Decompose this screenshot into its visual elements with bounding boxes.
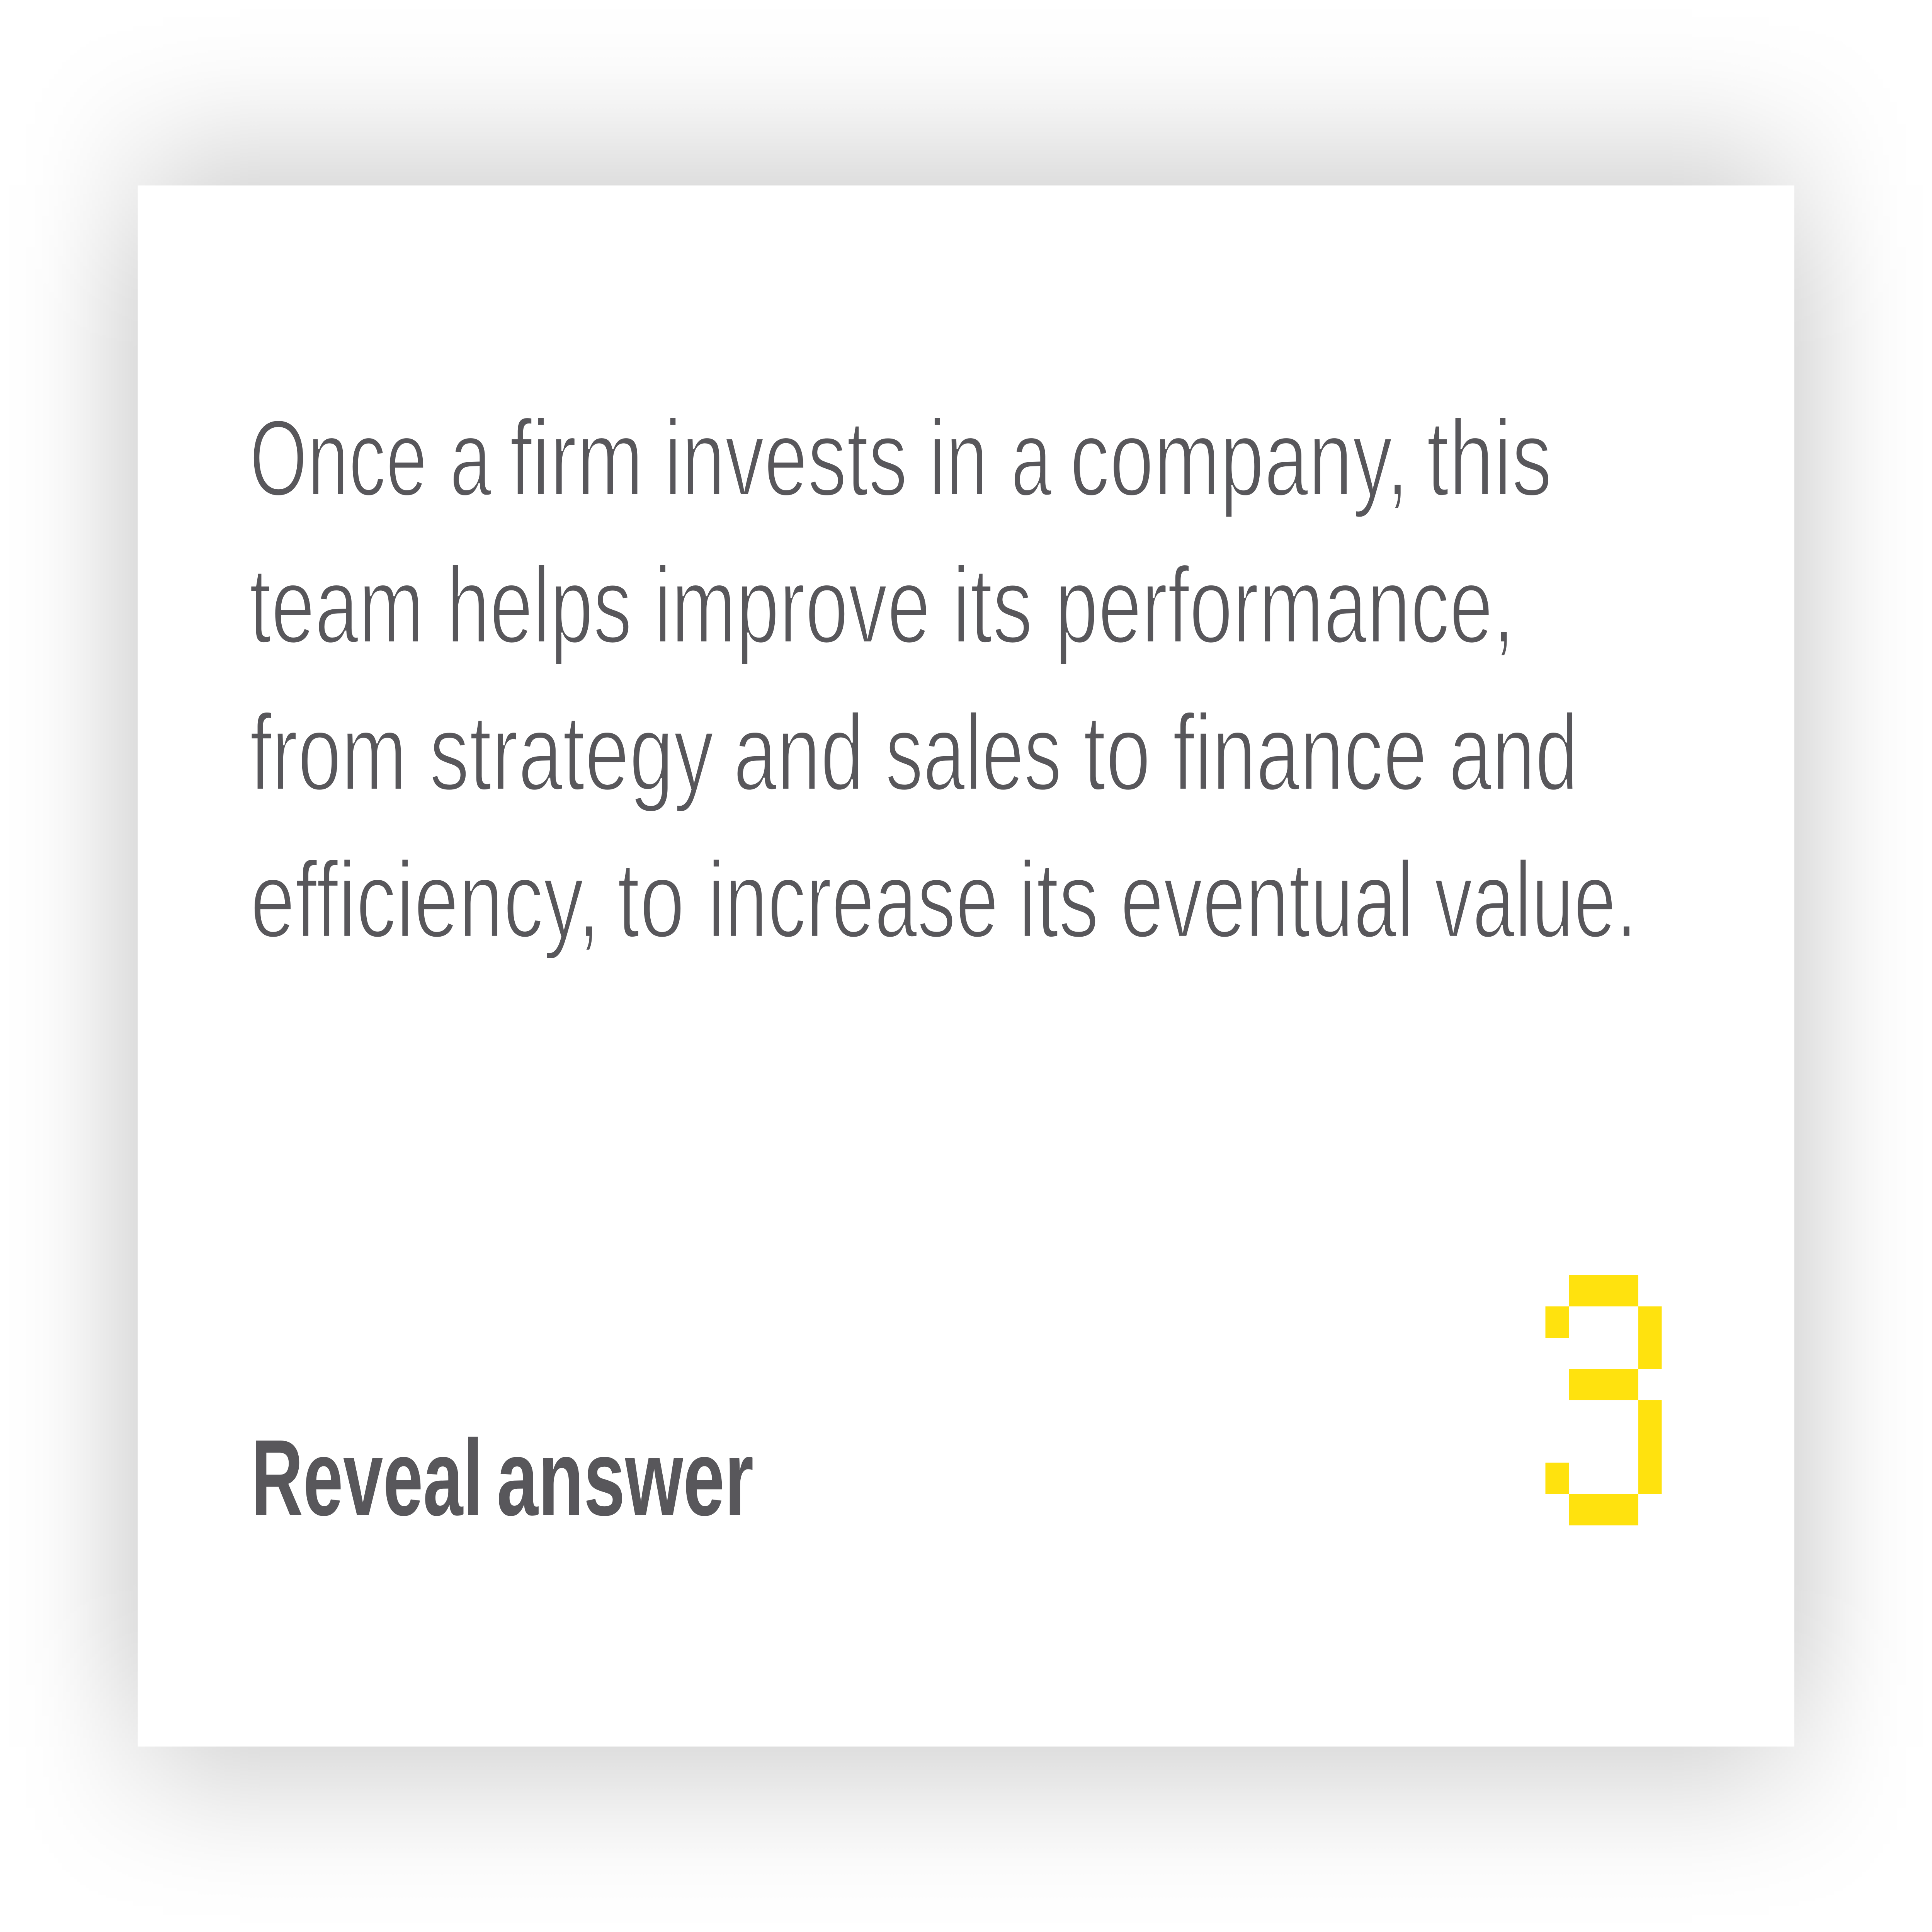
button label: reveal answer: Reveal [251,1418,483,1538]
line 1 [250,398,1552,519]
line 1: in [929,398,988,519]
line 2: performance, [1055,545,1515,666]
line 3: to [1083,692,1151,813]
line 2 [249,545,1515,666]
line 2: helps [447,545,632,666]
line 1: a [1011,398,1052,519]
line 3: sales [885,692,1062,813]
text block: card description [249,398,1637,960]
line 4: value. [1435,840,1637,960]
line 3: finance [1173,692,1427,813]
line 1: Once [250,398,427,519]
line 1: firm [510,398,643,519]
button label: reveal answer [251,1418,753,1538]
line 1: company, [1070,398,1408,519]
line 3: from [250,692,407,813]
line 4: efficiency, [250,840,600,960]
line 4 [250,840,1637,960]
line 1: a [450,398,492,519]
line 3: and [733,692,864,813]
line 1: invests [664,398,908,519]
line 2: team [249,545,424,666]
line 4: increase [707,840,998,960]
icon: yellow pixel numeral 3 [1546,1275,1662,1526]
line 2: improve [654,545,930,666]
panel: white question card [138,185,1794,1747]
line 3: and [1449,692,1578,813]
line 3: strategy [429,692,714,813]
button label: reveal answer: answer [497,1418,753,1538]
line 4: eventual [1121,840,1414,960]
line 4: its [1019,840,1099,960]
line 1: this [1427,398,1552,519]
line 3 [250,692,1578,813]
line 4: to [617,840,685,960]
line 2: its [952,545,1033,666]
